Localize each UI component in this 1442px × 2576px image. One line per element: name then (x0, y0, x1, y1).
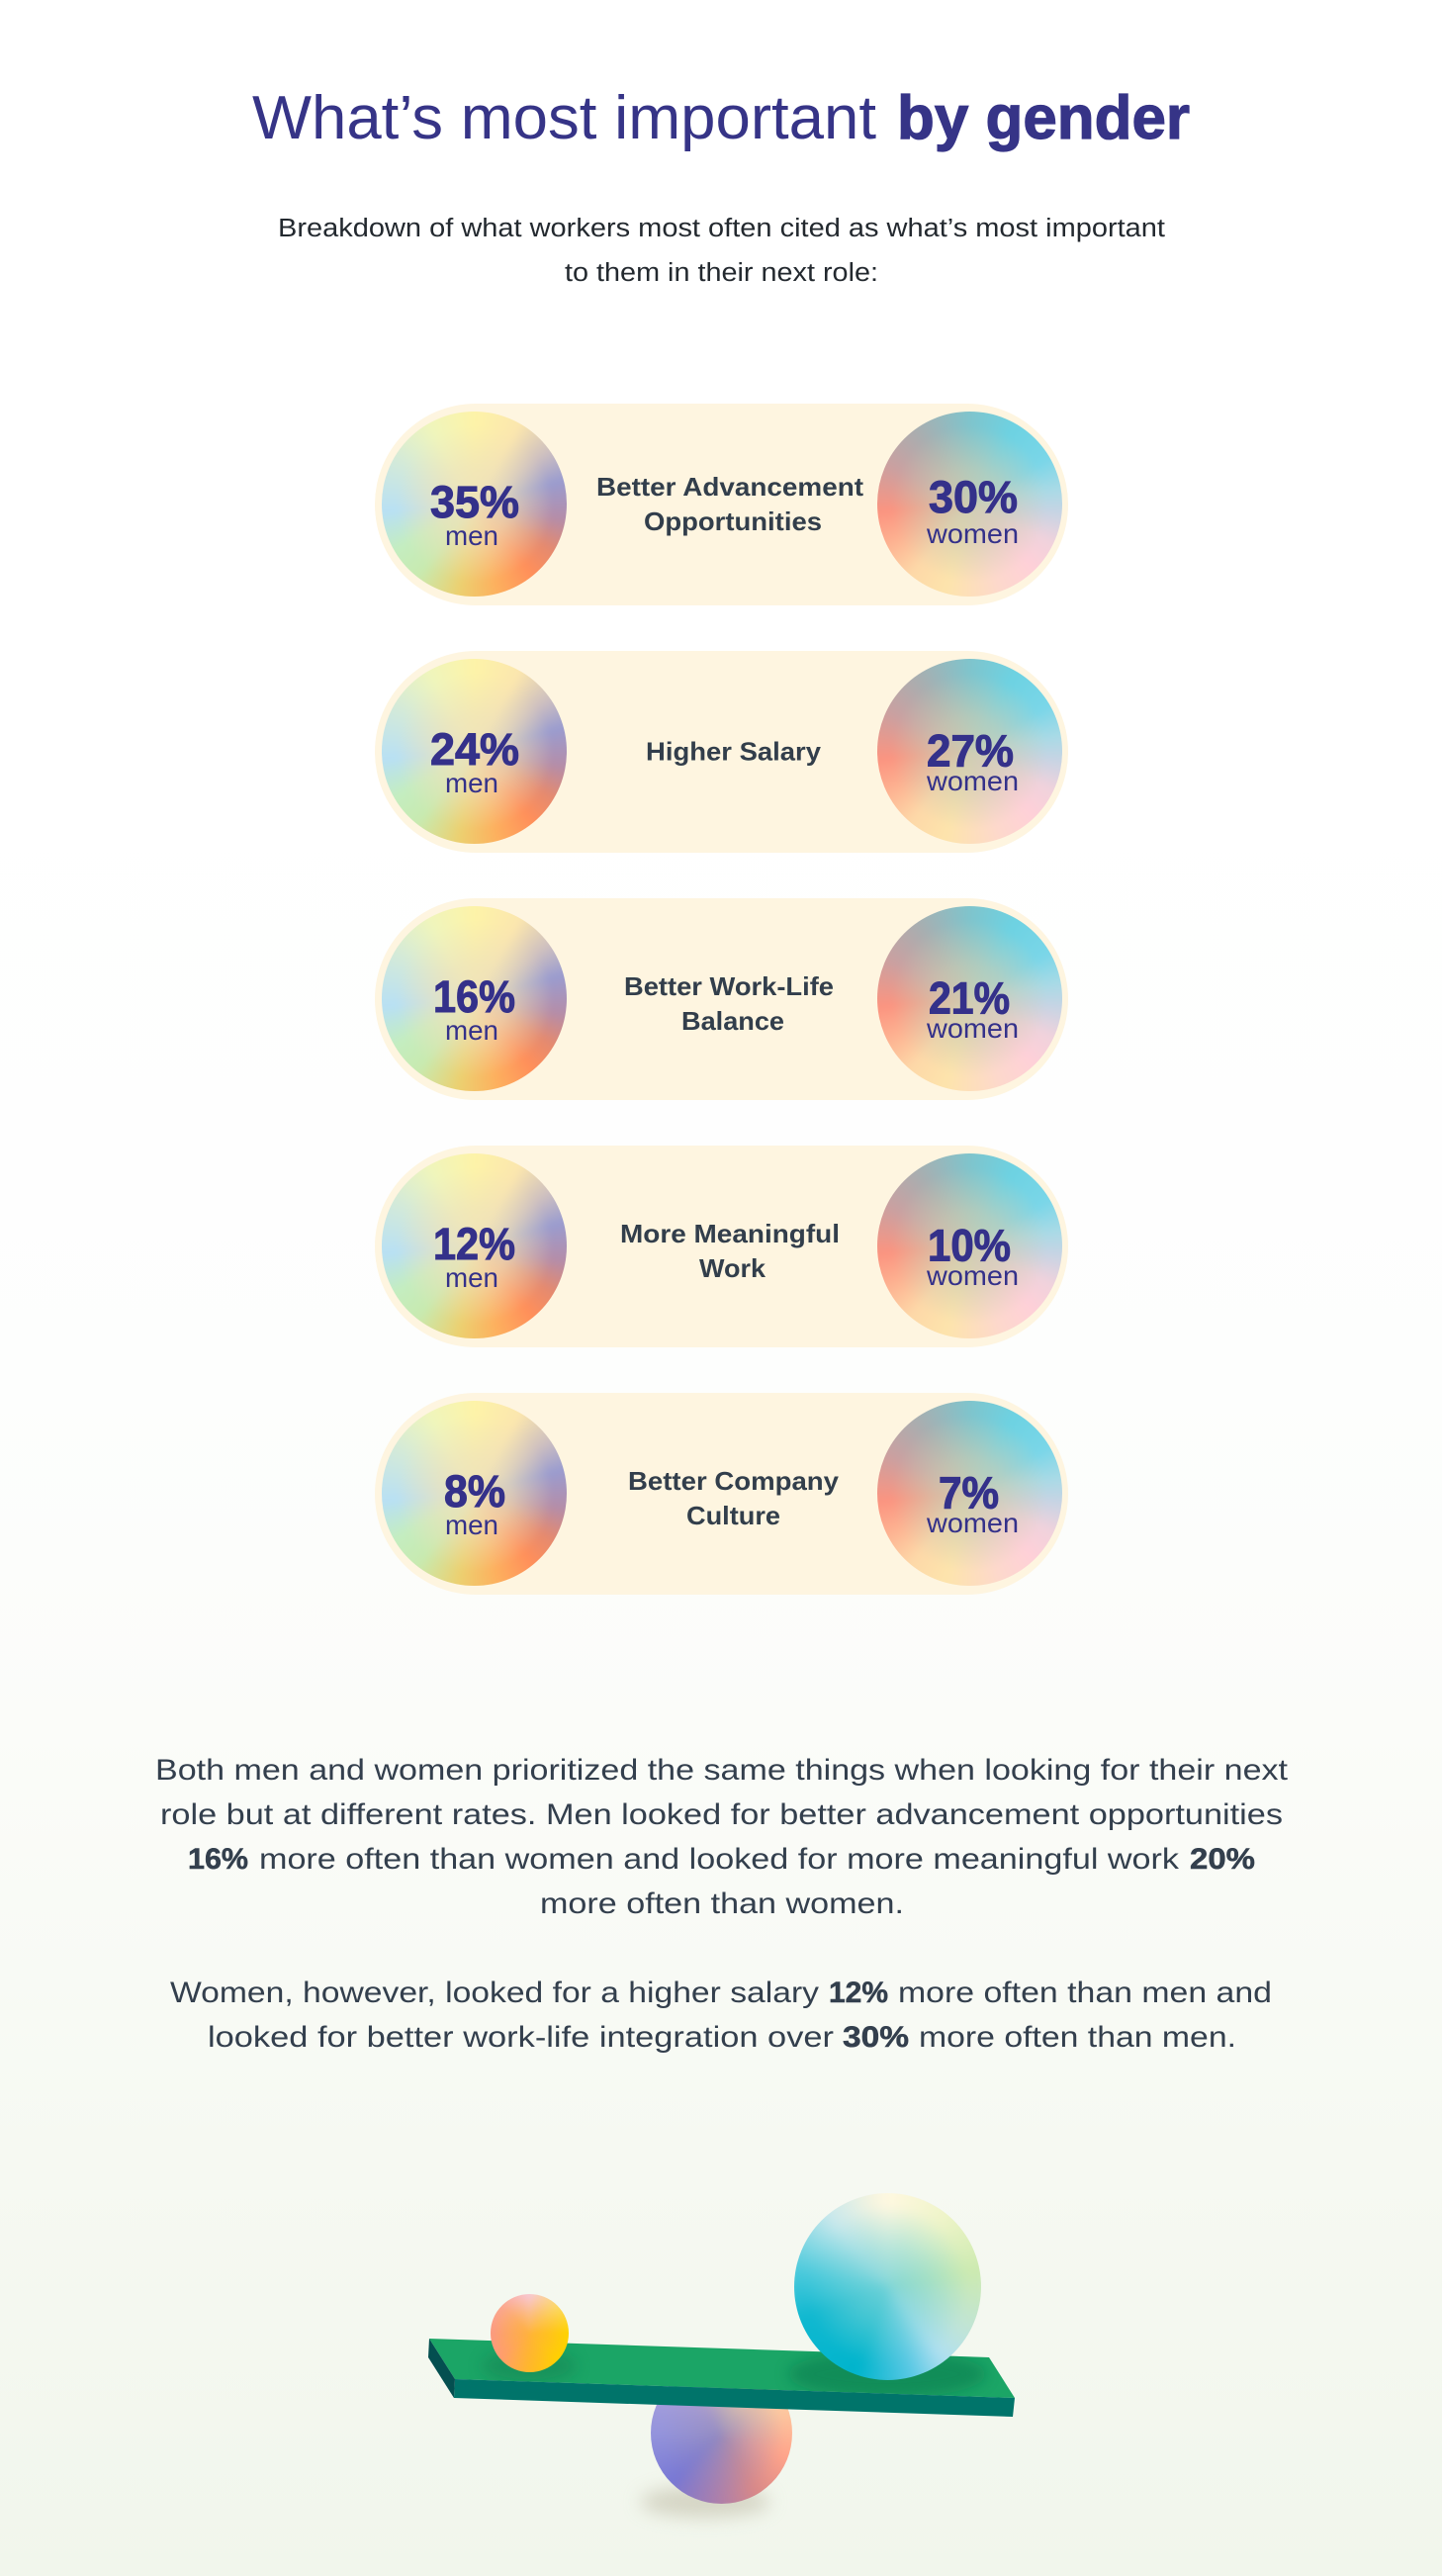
icon: women gradient circle (876, 412, 1062, 597)
title (252, 84, 1190, 152)
purple sphere (651, 2362, 791, 2504)
icon: men gradient circle (382, 1153, 567, 1338)
label: Better Work-Life (624, 971, 834, 1001)
label: More Meaningful (620, 1219, 840, 1248)
paragraph: both men and women: 16% (188, 1843, 248, 1876)
men stat: men (445, 768, 498, 798)
paragraph: women however: 30% (843, 2021, 909, 2054)
label: Higher Salary (646, 736, 822, 766)
men stat: 35% (430, 477, 519, 527)
women stat (926, 472, 1019, 549)
men stat (433, 971, 515, 1046)
paragraph: women however: Women, however, looked for a higher salary (170, 1977, 819, 2009)
label: Balance (681, 1006, 784, 1036)
men stat: men (445, 1015, 498, 1046)
label (596, 472, 863, 536)
plank front (454, 2379, 1015, 2417)
paragraph: women however: more often than men and (898, 1977, 1272, 2009)
paragraph: women however: more often than men. (919, 2021, 1236, 2054)
label (624, 971, 834, 1036)
men stat: 12% (433, 1219, 515, 1269)
panel: better company culture (375, 1393, 1068, 1595)
women stat: 7% (939, 1468, 999, 1518)
plank top (429, 2339, 1015, 2398)
men stat (430, 477, 519, 551)
women stat: 10% (928, 1221, 1011, 1270)
women stat: women (926, 518, 1019, 549)
paragraph: both men and women: Both men and women prioritized the same things when looking for their next (155, 1754, 1289, 1787)
women stat (926, 1221, 1019, 1291)
intro text: Breakdown of what workers most often cited as what’s most important (278, 215, 1165, 242)
men stat (444, 1466, 505, 1540)
men stat: 8% (444, 1466, 505, 1517)
women stat (926, 973, 1019, 1044)
icon: women gradient circle (876, 659, 1062, 844)
women stat: 30% (929, 472, 1018, 522)
women stat: women (926, 1508, 1019, 1538)
icon: men gradient circle (382, 659, 567, 844)
women stat: women (926, 766, 1019, 796)
illustration: balancing seesaw with spheres (428, 2193, 1015, 2518)
women stat (926, 726, 1019, 796)
plank left side (428, 2339, 455, 2398)
label: Culture (686, 1501, 780, 1530)
label: Work (699, 1253, 766, 1283)
label: Better Company (628, 1466, 840, 1496)
plank shadows (485, 2351, 987, 2396)
men stat: men (445, 1510, 498, 1540)
panel: higher salary (375, 651, 1068, 853)
title: What’s most important (252, 84, 876, 152)
large teal sphere (794, 2193, 981, 2380)
icon: men gradient circle (382, 906, 567, 1091)
label (620, 1219, 840, 1283)
women stat: 27% (927, 726, 1014, 776)
icon: women gradient circle (876, 1153, 1062, 1338)
paragraph: both men and women: role but at different rates. Men looked for better advancement opportunities (160, 1798, 1283, 1831)
paragraph: both men and women: more often than women. (540, 1887, 904, 1920)
icon: men gradient circle (382, 412, 567, 597)
paragraph: both men and women (155, 1754, 1289, 1920)
small orange sphere (491, 2294, 568, 2372)
label (628, 1466, 840, 1530)
shadow under purple sphere (640, 2486, 770, 2518)
men stat: 24% (430, 724, 519, 775)
men stat: men (445, 1262, 498, 1293)
paragraph: both men and women: 20% (1190, 1843, 1255, 1876)
panel: better work-life balance (375, 898, 1068, 1100)
paragraph: women however (170, 1977, 1272, 2054)
title: by gender (897, 84, 1190, 152)
paragraph: both men and women: more often than women and looked for more meaningful work (259, 1843, 1180, 1876)
men stat (433, 1219, 515, 1293)
intro text: to them in their next role: (565, 259, 878, 287)
women stat (926, 1468, 1019, 1538)
panel: better advancement opportunities (375, 404, 1068, 605)
men stat (430, 724, 519, 798)
men stat: 16% (433, 971, 515, 1022)
men stat: men (445, 520, 498, 551)
label: Opportunities (644, 506, 822, 536)
label: Better Advancement (596, 472, 863, 502)
icon: women gradient circle (876, 906, 1062, 1091)
paragraph: women however: 12% (829, 1977, 888, 2009)
women stat: women (926, 1260, 1019, 1291)
women stat: women (926, 1013, 1019, 1044)
intro text (278, 215, 1165, 287)
paragraph: women however: looked for better work-life integration over (208, 2021, 834, 2054)
women stat: 21% (929, 973, 1010, 1023)
panel: more meaningful work (375, 1146, 1068, 1347)
icon: men gradient circle (382, 1401, 567, 1586)
icon: women gradient circle (876, 1401, 1062, 1586)
